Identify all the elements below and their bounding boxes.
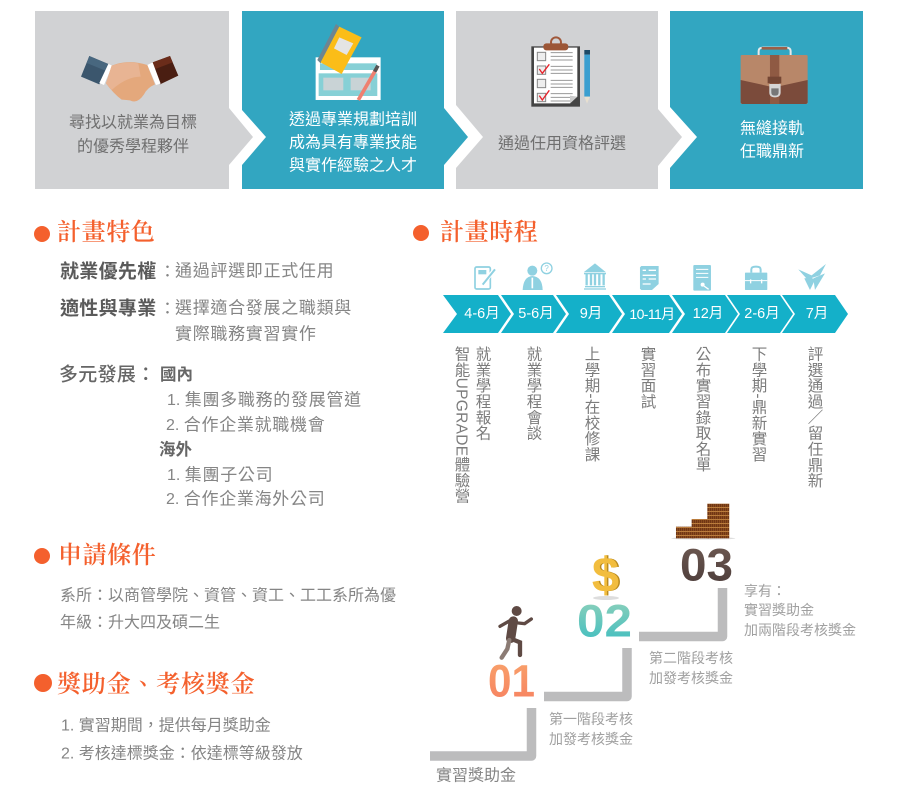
- month labels: [464, 306, 828, 322]
- icon: interview person: ?: [544, 264, 549, 273]
- icon: form and pencil: [475, 267, 495, 289]
- vertical milestones: [452, 345, 823, 504]
- text: stage two: [649, 650, 733, 686]
- text: panel 2 caption: 成為具有專業技能: [289, 134, 417, 152]
- text: aptitude and expertise: ：: [159, 300, 177, 318]
- icon: dollar sign: $: [593, 549, 621, 603]
- vertical milestones: 上學期-在校修課: [582, 346, 600, 462]
- text: stipend details: 1. 實習期間，提供每月獎助金: [61, 716, 271, 734]
- month labels: 10-11月: [629, 306, 675, 322]
- text: aptitude and expertise: 適性與專業: [60, 296, 157, 320]
- vertical milestones: 公布實習錄取名單: [694, 346, 711, 472]
- text: panel 4 caption: [740, 120, 804, 160]
- icon: school building: [584, 263, 606, 290]
- icon: interview person: [523, 263, 552, 290]
- text: stage one: 加發考核獎金: [549, 731, 633, 747]
- heading: program timeline: 計畫時程: [440, 219, 538, 246]
- text: panel 2 caption: 與實作經驗之人才: [289, 156, 417, 174]
- icon: briefcase: [741, 48, 808, 104]
- month labels: 12月: [693, 306, 723, 322]
- vertical milestones: 智能UPGRADE體驗營: [452, 346, 470, 504]
- text: full benefit: 實習獎助金: [744, 602, 814, 618]
- month labels: 4-6月: [464, 306, 500, 322]
- text: full benefit: 享有：: [744, 583, 786, 599]
- icon: document: [640, 266, 659, 290]
- text: diverse development: [59, 364, 362, 508]
- text: employment priority: ：: [159, 262, 177, 282]
- text: panel 1 caption: 的優秀學程夥伴: [77, 138, 189, 156]
- text: aptitude and expertise: [60, 296, 352, 344]
- text: panel 4 caption: 無縫接軌: [740, 120, 804, 138]
- text: panel 2 caption: [289, 110, 417, 174]
- vertical milestones: 評選通過 ／ 留任鼎新: [806, 346, 823, 488]
- text: panel 2 caption: 透過專業規劃培訓: [289, 110, 417, 128]
- text: panel 4 caption: 任職鼎新: [740, 142, 804, 160]
- section: stipend and bonus: [34, 671, 303, 762]
- text: stage two: 第二階段考核: [649, 650, 733, 666]
- text: aptitude and expertise: 選擇適合發展之職類與: [175, 298, 352, 318]
- icon: running person: [500, 606, 531, 658]
- month labels: 2-6月: [744, 306, 780, 322]
- text: diverse development: 1. 集團子公司: [167, 466, 273, 484]
- icon: handshake: [81, 56, 178, 101]
- month labels: 7月: [806, 306, 828, 322]
- icon: document with magnifier: [693, 265, 711, 291]
- number 03: 03: [680, 540, 733, 590]
- text: eligibility details: [60, 586, 396, 632]
- section: stipend stairs: [430, 504, 856, 784]
- number 01: 01: [488, 656, 535, 706]
- text: diverse development: 1. 集團多職務的發展管道: [167, 390, 362, 410]
- text: diverse development: 2. 合作企業就職機會: [166, 416, 325, 434]
- text: diverse development: 多元發展：: [59, 364, 156, 386]
- text: diverse development: 海外: [159, 440, 192, 459]
- text: panel 1 caption: 尋找以就業為目標: [69, 114, 197, 132]
- panel: qualification review: [456, 11, 682, 189]
- heading: program features: 計畫特色: [57, 219, 155, 246]
- section: program features: [34, 219, 362, 508]
- stair lines: [430, 588, 722, 756]
- text: base stipend: 實習獎助金: [436, 766, 516, 784]
- panel: professional training: [242, 11, 468, 189]
- panel: find partner schools: [35, 11, 253, 189]
- text: employment priority: [60, 260, 334, 282]
- icon: company logo mark: [798, 264, 826, 290]
- vertical milestones: 下學期-鼎新實習: [750, 346, 767, 462]
- text: panel 3 caption: 通過任用資格評選: [498, 134, 626, 152]
- text: aptitude and expertise: 實際職務實習實作: [175, 324, 317, 344]
- panel: seamless onboarding: [670, 11, 863, 189]
- text: eligibility details: 年級：升大四及碩二生: [60, 614, 220, 632]
- text: stage one: 第一階段考核: [549, 711, 633, 727]
- text: stipend details: 2. 考核達標獎金：依達標等級發放: [61, 744, 303, 762]
- icon: coin stacks: [671, 504, 735, 540]
- text: employment priority: 就業優先權: [60, 260, 157, 282]
- icon: briefcase: [745, 267, 767, 290]
- text: eligibility details: 系所：以商管學院、資管、資工、工工系所為優: [60, 586, 396, 604]
- section: eligibility: [34, 542, 396, 632]
- vertical milestones: 實習面試: [638, 345, 656, 409]
- text: employment priority: 通過評選即正式任用: [175, 262, 334, 280]
- text: full benefit: 加兩階段考核獎金: [744, 622, 856, 638]
- text: stipend details: [61, 716, 303, 762]
- heading: eligibility: 申請條件: [58, 542, 156, 569]
- month labels: 9月: [580, 306, 602, 322]
- month labels: 5-6月: [518, 306, 554, 322]
- text: diverse development: 國內: [160, 366, 193, 384]
- chevron bar: [443, 295, 848, 333]
- text: stage two: 加發考核獎金: [649, 670, 733, 686]
- icon: dollar sign: $: [592, 549, 619, 603]
- timeline icons: [475, 263, 826, 291]
- icon: clipboard and pencil: [531, 37, 590, 107]
- icon: book and blueprint: [316, 24, 381, 100]
- heading: stipend and bonus: 獎助金、考核獎金: [57, 671, 255, 698]
- vertical milestones: 就業學程報名: [474, 346, 491, 441]
- text: full benefit: [744, 583, 856, 638]
- text: diverse development: 2. 合作企業海外公司: [166, 490, 325, 508]
- vertical milestones: 就業學程會談: [524, 346, 542, 441]
- text: stage one: [549, 711, 633, 747]
- number 02: 02: [577, 596, 632, 646]
- section: program timeline: [413, 219, 848, 504]
- text: panel 1 caption: [69, 114, 197, 156]
